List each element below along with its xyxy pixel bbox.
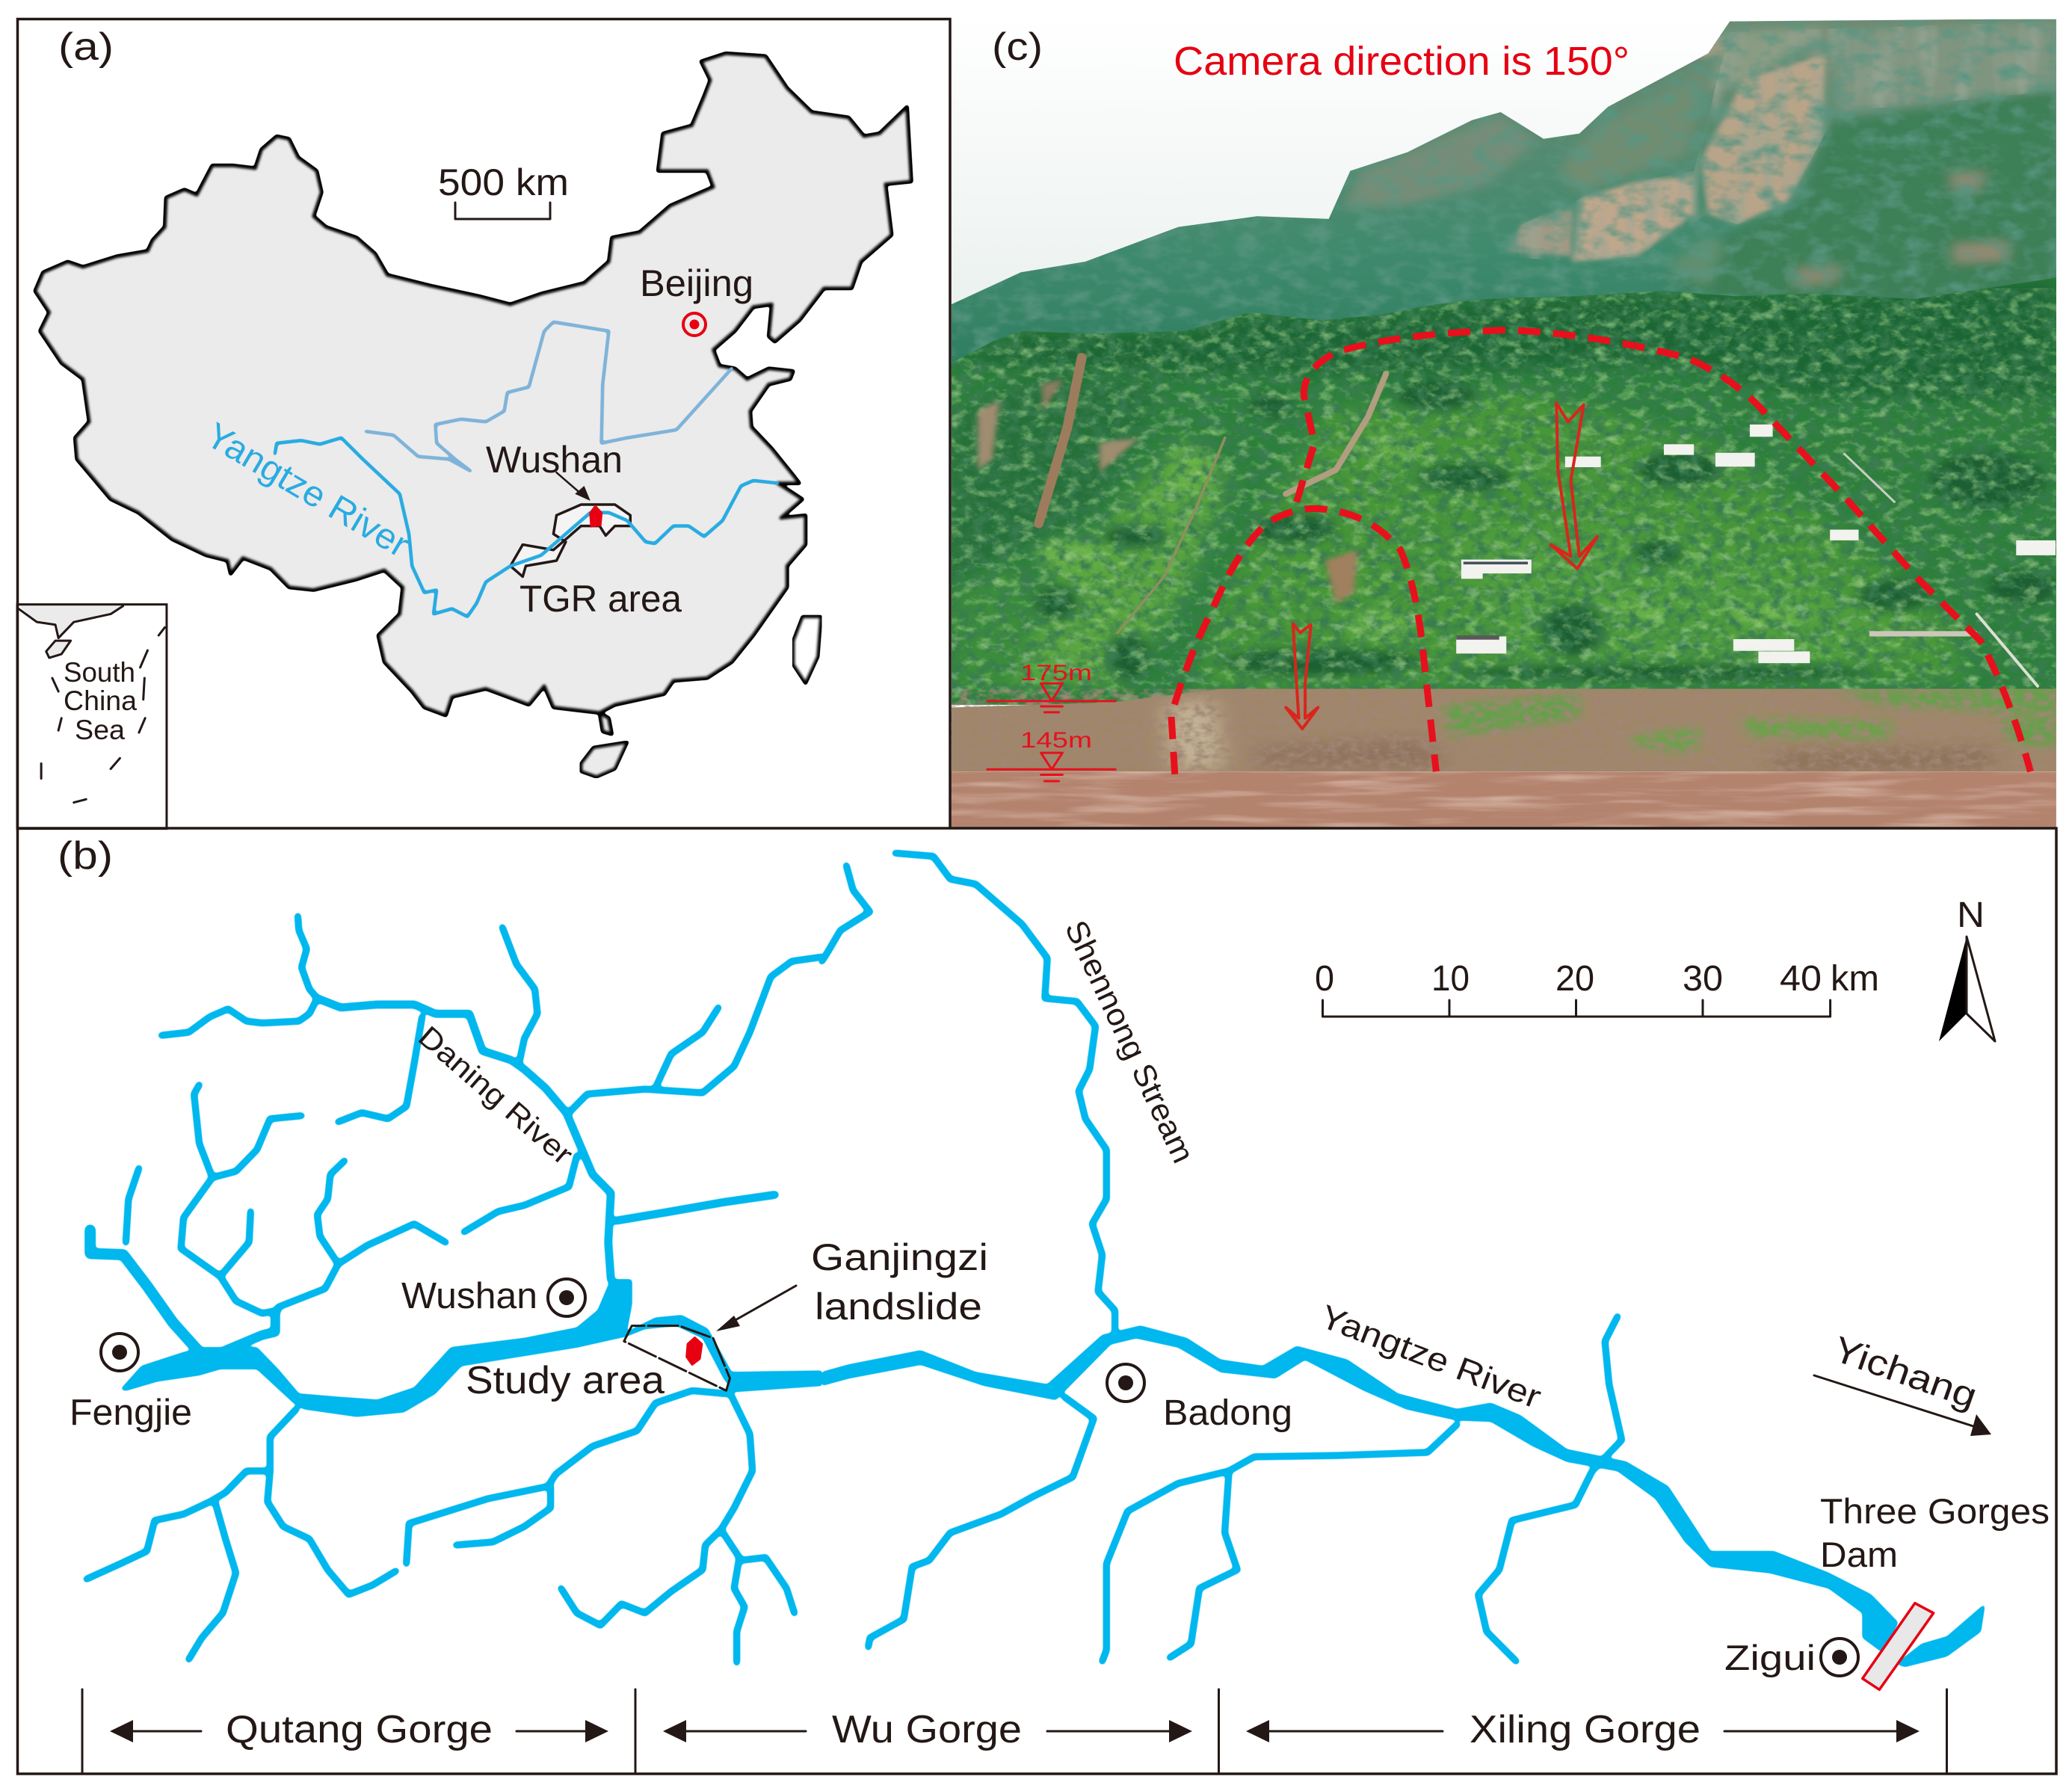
panel label c: (c): [992, 25, 1043, 69]
city symbol Fengjie: [101, 1334, 138, 1371]
city symbol Badong: [1107, 1364, 1144, 1402]
water level markers: [987, 683, 1115, 781]
landslide boundaries: dashed red lines: [1171, 330, 2030, 774]
label Yichang: Yichang: [1828, 1329, 1982, 1417]
Hainan: [581, 742, 627, 777]
China outline: [35, 53, 911, 734]
label Xiling Gorge: Xiling Gorge: [1470, 1708, 1701, 1751]
TGR area outline: [511, 505, 630, 576]
scale bar b: 0: [1315, 959, 1334, 999]
photo text: 175 m water level: 175m: [1020, 661, 1092, 685]
panel label a: (a): [58, 25, 114, 69]
scale bar b: 40: [1780, 959, 1822, 999]
north arrow: [1939, 896, 1995, 1041]
gorge extent arrows: [110, 1720, 1920, 1742]
photo scars and roads: [978, 358, 2038, 686]
label Sea: Sea: [75, 715, 125, 745]
photo cliff streak texture: [1493, 22, 2059, 267]
label Three Gorges: Three Gorges: [1820, 1491, 2050, 1531]
sliding direction arrow, large: [1551, 403, 1597, 569]
photo text: 145 m water level: 145m: [1020, 728, 1092, 753]
panel c: landslide photograph: [949, 16, 2059, 830]
photo water: [949, 771, 2059, 830]
label Wushan: Wushan: [401, 1276, 537, 1316]
panel label b: (b): [58, 834, 113, 878]
label China: China: [64, 685, 137, 716]
river channels east: [821, 853, 1985, 1667]
Ganjingzi landslide red marker: [687, 1338, 702, 1364]
label Zigui: Zigui: [1724, 1638, 1816, 1677]
Beijing symbol: [683, 313, 706, 336]
arrow to Ganjingzi landslide: [716, 1286, 796, 1331]
label Fengjie: Fengjie: [70, 1393, 192, 1433]
label 500 km: 500 km: [438, 161, 569, 203]
label Wushan: Wushan: [486, 439, 623, 481]
label Qutang Gorge: Qutang Gorge: [226, 1708, 493, 1751]
Yangtze River line: [275, 438, 778, 617]
arrow to Wushan: [557, 472, 591, 501]
label Study area: Study area: [466, 1359, 665, 1402]
photo cliffs and rock faces: [1343, 22, 2057, 299]
study area outline: [624, 1326, 730, 1390]
label Yangtze River on map b: Yangtze River: [1315, 1298, 1546, 1416]
scale bar b: 20: [1555, 959, 1594, 999]
label Wu Gorge: Wu Gorge: [832, 1708, 1022, 1751]
photo mountain texture: [952, 19, 2056, 356]
scale bar b: km: [1831, 959, 1879, 999]
panel b: river network, west part: [87, 916, 822, 1662]
scale bar b: [1315, 959, 1879, 1017]
Taiwan: [793, 617, 821, 683]
photo houses: [1456, 425, 2056, 663]
label Dam: Dam: [1820, 1535, 1898, 1574]
river channels west: [87, 916, 822, 1662]
label landslide: landslide: [815, 1286, 982, 1328]
photo text: camera direction: Camera direction is 150°: [1174, 39, 1629, 84]
panel a: China map: [17, 53, 911, 829]
panel b: river network, east part: [821, 853, 1985, 1689]
label TGR area: TGR area: [519, 578, 682, 620]
label Daning River: Daning River: [412, 1020, 579, 1171]
gorge divider lines: [82, 1689, 1946, 1774]
Wushan red marker: [589, 505, 602, 528]
city symbol Zigui: [1821, 1639, 1858, 1676]
scale bar a: [455, 203, 550, 219]
north arrow: N: [1957, 896, 1985, 935]
sliding direction arrow, small: [1286, 623, 1318, 729]
scale bar b: 10: [1431, 959, 1470, 999]
inset box: South China Sea: [17, 605, 167, 829]
label Ganjingzi: Ganjingzi: [811, 1236, 988, 1278]
Yellow River: [366, 322, 732, 471]
photo far mountains: [952, 19, 2057, 406]
photo sky: [951, 134, 1573, 443]
label Shennong Stream: Shennong Stream: [1058, 915, 1201, 1168]
photo near hillside vegetation: [952, 277, 2057, 705]
photo exposed bank: [949, 683, 2059, 774]
city symbol Wushan: [548, 1279, 585, 1316]
label Yangtze River on map a: Yangtze River: [199, 416, 416, 565]
scale bar b: 30: [1683, 959, 1723, 999]
label Badong: Badong: [1163, 1393, 1292, 1433]
label South: South: [64, 657, 135, 688]
arrow to Yichang: [1814, 1375, 1991, 1436]
label Beijing: Beijing: [640, 262, 753, 304]
Three Gorges Dam: [1863, 1603, 1934, 1689]
